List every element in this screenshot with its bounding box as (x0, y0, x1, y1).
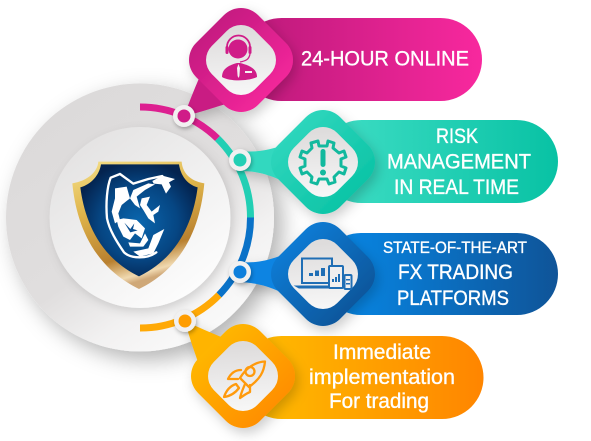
text: risk management: MANAGEMENT (387, 150, 531, 174)
callout: teal diamond (240, 100, 385, 224)
panel: 24-hour online (179, 0, 482, 122)
callout: orange diamond (181, 314, 305, 438)
icon tile: risk (280, 119, 366, 205)
icon tile: rocket (200, 333, 286, 419)
icon: devices (296, 258, 352, 289)
pill: trading platforms (320, 233, 558, 315)
text: immediate implementation: Immediate (333, 341, 431, 364)
icon: gear with exclamation (300, 141, 346, 184)
text: risk management: RISK (436, 125, 478, 148)
text: trading platforms: STATE-OF-THE-ART (383, 238, 527, 257)
node: orange (174, 310, 196, 332)
panel: trading platforms (240, 212, 558, 336)
central disc (6, 84, 274, 352)
icon: headset agent (222, 36, 257, 80)
panel: immediate implementation (181, 314, 484, 438)
text: trading platforms: FX TRADING (398, 261, 513, 284)
icon tile: devices (280, 231, 366, 317)
callout: pink diamond (179, 0, 303, 122)
text: 24-hour online: 24-HOUR ONLINE (301, 48, 469, 70)
node: blue (229, 261, 251, 283)
icon: rocket (224, 362, 265, 398)
timeline ring (140, 107, 251, 328)
logo: shield with bulldog (72, 162, 204, 289)
pill: 24-hour online (240, 18, 482, 101)
text: risk management: IN REAL TIME (394, 176, 519, 199)
node: pink (173, 105, 195, 127)
pill: risk management (320, 120, 558, 203)
panel: risk management (240, 100, 558, 224)
text: trading platforms: PLATFORMS (397, 287, 509, 310)
text: immediate implementation: For trading (329, 390, 429, 413)
icon tile: agent (198, 17, 284, 103)
callout: blue diamond (240, 212, 385, 336)
text: immediate implementation: implementation (309, 366, 455, 389)
node: teal (229, 149, 251, 171)
pill: immediate implementation (240, 336, 484, 419)
